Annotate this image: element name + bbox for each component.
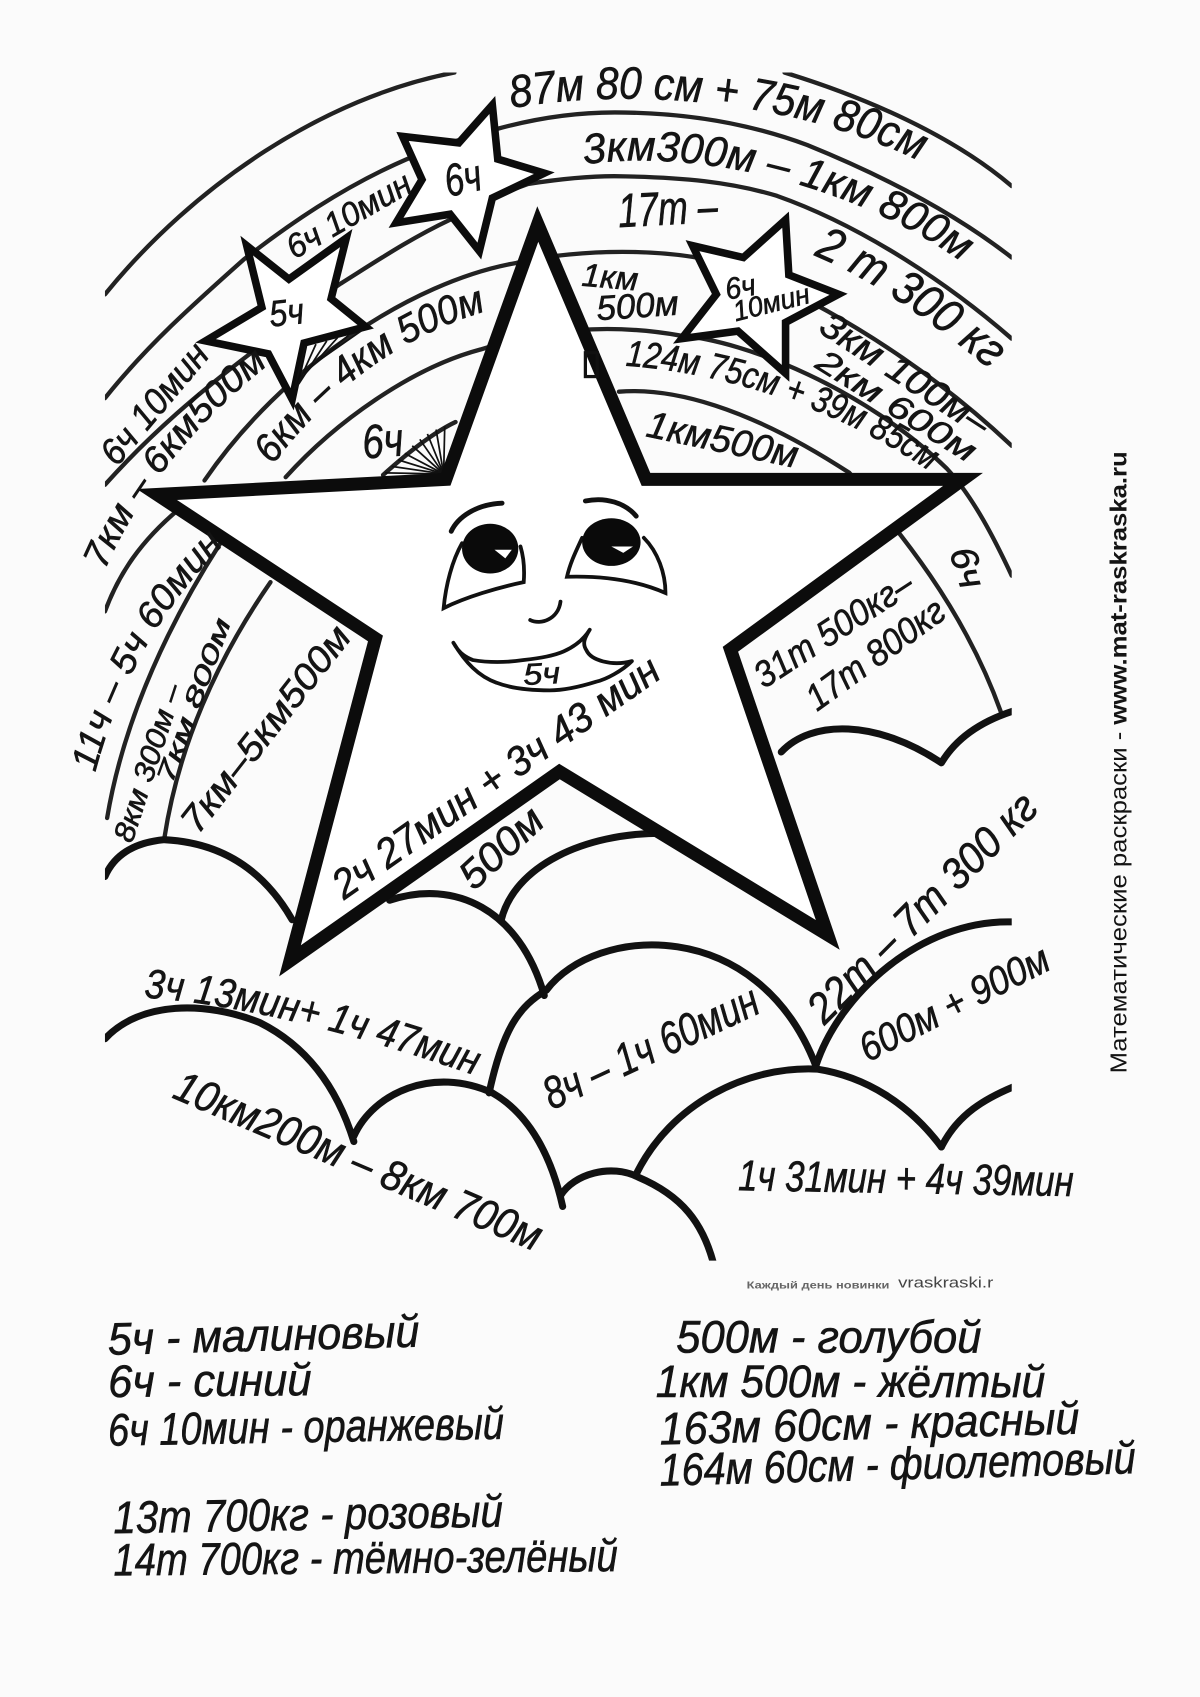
label: 6ч 10мин left: 6ч 10мин bbox=[92, 334, 217, 473]
label: 6км - 4км 500м: 6км – 4км 500м bbox=[257, 290, 482, 461]
label: 17т 800кг: 17т 800кг bbox=[798, 590, 953, 718]
main star bbox=[157, 224, 963, 961]
mouth bbox=[453, 630, 632, 690]
right pupil bbox=[582, 518, 641, 566]
small star: 6ч bbox=[396, 105, 544, 251]
hatch: 5ч star bbox=[294, 330, 362, 390]
label: 1км 500м: 1км500м bbox=[643, 404, 802, 477]
coloring page bbox=[74, 66, 1135, 1576]
star glitch mark bbox=[585, 353, 597, 377]
label: 500м: 500м bbox=[450, 798, 553, 898]
label: 8км 300м: 8км 300м – bbox=[108, 679, 190, 846]
label: 1ч 31мин + 4ч 39мин: 1ч 31мин + 4ч 39мин bbox=[738, 1152, 1074, 1206]
label: 6ч right: 6ч bbox=[940, 542, 993, 594]
label: 11ч - 5ч 60мин: 11ч – 5ч 60мин bbox=[74, 536, 221, 772]
label: 3км 100м: 3км 100м– bbox=[813, 303, 999, 444]
label: 6ч 10мин upper: 6ч 10мин bbox=[280, 165, 418, 267]
label: 3км 300м - 1км 800м: 3км300м – 1км 800м bbox=[584, 132, 974, 260]
label: 6ч in small star: 6ч bbox=[723, 269, 758, 307]
legend: left column bbox=[107, 1306, 618, 1585]
label: 7км - 6км 500м: 7км – 6км500м bbox=[83, 354, 265, 566]
legend: left column: 13т 700кг - розовый bbox=[113, 1485, 503, 1543]
label: 10мин in small star: 10мин bbox=[730, 278, 813, 327]
label: 124м 75см + 39м 85см: 124м 75см + 39м 85см bbox=[626, 341, 940, 470]
left eye bbox=[444, 543, 524, 608]
legend: right column: 164м 60см - фиолетовый bbox=[659, 1432, 1136, 1496]
label: 2км 600м: 2км 600м bbox=[809, 342, 983, 469]
math labels bbox=[74, 66, 1074, 1261]
label: 10км 200м - 8км 700м: 10км200м – 8км 700м bbox=[167, 1062, 549, 1261]
label: 87м 80см + 75м 80см: 87м 80 см + 75м 80см bbox=[511, 66, 928, 159]
label: 500м: 500м bbox=[595, 285, 680, 328]
watermark: vraskraski.r bbox=[898, 1275, 993, 1292]
legend: left column: 6ч - синий bbox=[108, 1354, 312, 1407]
label: 31т 500кг: 31т 500кг– bbox=[746, 562, 921, 696]
label: 600м + 900м: 600м + 900м bbox=[852, 937, 1057, 1071]
drawing: rainbow, clouds and stars bbox=[74, 66, 1074, 1261]
legend: left column: 14т 700кг - тёмно-зелёный bbox=[113, 1530, 618, 1585]
side caption: Математические раскраски - www.mat-raskraska.ru bbox=[1105, 451, 1131, 1073]
label: 6ч star: 6ч bbox=[439, 149, 486, 207]
watermark bbox=[747, 1275, 993, 1292]
label: 5ч star: 5ч bbox=[267, 290, 306, 335]
legend: right column: 163м 60см - красный bbox=[659, 1393, 1080, 1455]
label: 7км - 5км 500м: 7км–5км500м bbox=[172, 617, 359, 840]
label: 7км 800м: 7км 800м bbox=[151, 614, 237, 787]
small star: 6ч 10мин bbox=[682, 220, 839, 373]
label: 22т - 7т 300кг: 22т – 7т 300 кг bbox=[797, 783, 1047, 1034]
nose bbox=[530, 602, 561, 622]
clouds bbox=[105, 710, 1017, 1266]
label: 1км: 1км bbox=[580, 257, 640, 298]
legend: right column: 500м - голубой bbox=[676, 1312, 981, 1363]
label: 2т 300кг: 2 т 300 кг bbox=[813, 229, 1004, 366]
watermark: Каждый день новинки bbox=[747, 1281, 889, 1292]
legend: left column: 5ч - малиновый bbox=[107, 1306, 420, 1365]
left eyebrow bbox=[451, 503, 502, 531]
legend: right column bbox=[656, 1312, 1136, 1496]
label: 2ч 27мин + 3ч 43мин: 2ч 27мин + 3ч 43 мин bbox=[322, 647, 668, 908]
legend: right column: 1км 500м - жёлтый bbox=[656, 1356, 1045, 1407]
label: 17т: 17т – bbox=[617, 180, 719, 238]
hatch: 6ч corner bbox=[385, 426, 445, 474]
label: 3ч 13мин + 1ч 47мин: 3ч 13мин+ 1ч 47мин bbox=[144, 970, 482, 1074]
eye highlights bbox=[494, 550, 512, 558]
label: 8ч - 1ч 60мин: 8ч – 1ч 60мин bbox=[535, 975, 767, 1119]
left pupil bbox=[462, 524, 518, 573]
rainbow arcs bbox=[105, 73, 1012, 838]
face bbox=[444, 500, 665, 690]
label: 5ч mouth: 5ч bbox=[522, 657, 561, 692]
label: 6ч rainbow: 6ч bbox=[360, 413, 405, 470]
legend: left column: 6ч 10мин - оранжевый bbox=[107, 1398, 504, 1456]
right eyebrow bbox=[585, 500, 636, 516]
small star: 5ч bbox=[206, 238, 366, 399]
right eye bbox=[567, 538, 665, 593]
